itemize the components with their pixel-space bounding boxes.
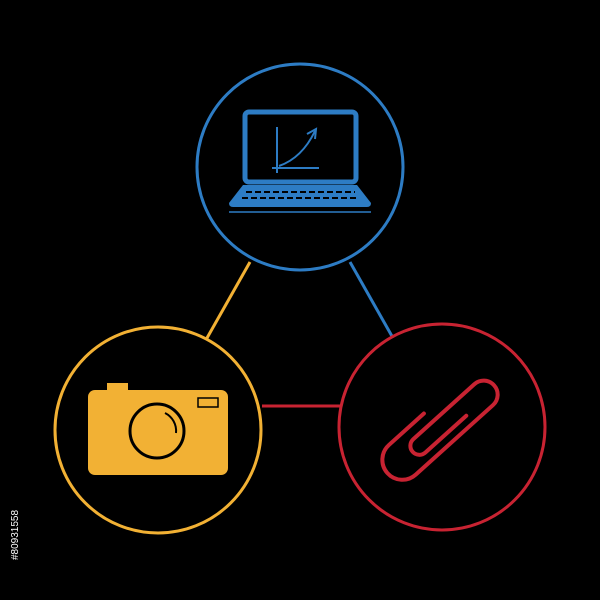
- image id text: #80931558: [10, 510, 21, 560]
- icon: paperclip: [374, 366, 503, 488]
- icon: laptop with chart: [229, 112, 371, 212]
- connector: laptop to camera: [207, 262, 250, 338]
- connector: camera to paperclip: [262, 404, 340, 408]
- connector: laptop to paperclip: [350, 262, 393, 338]
- node: paperclip: [339, 324, 545, 530]
- node: camera: [55, 327, 261, 533]
- node: laptop: [197, 64, 403, 270]
- icon: camera: [88, 383, 228, 475]
